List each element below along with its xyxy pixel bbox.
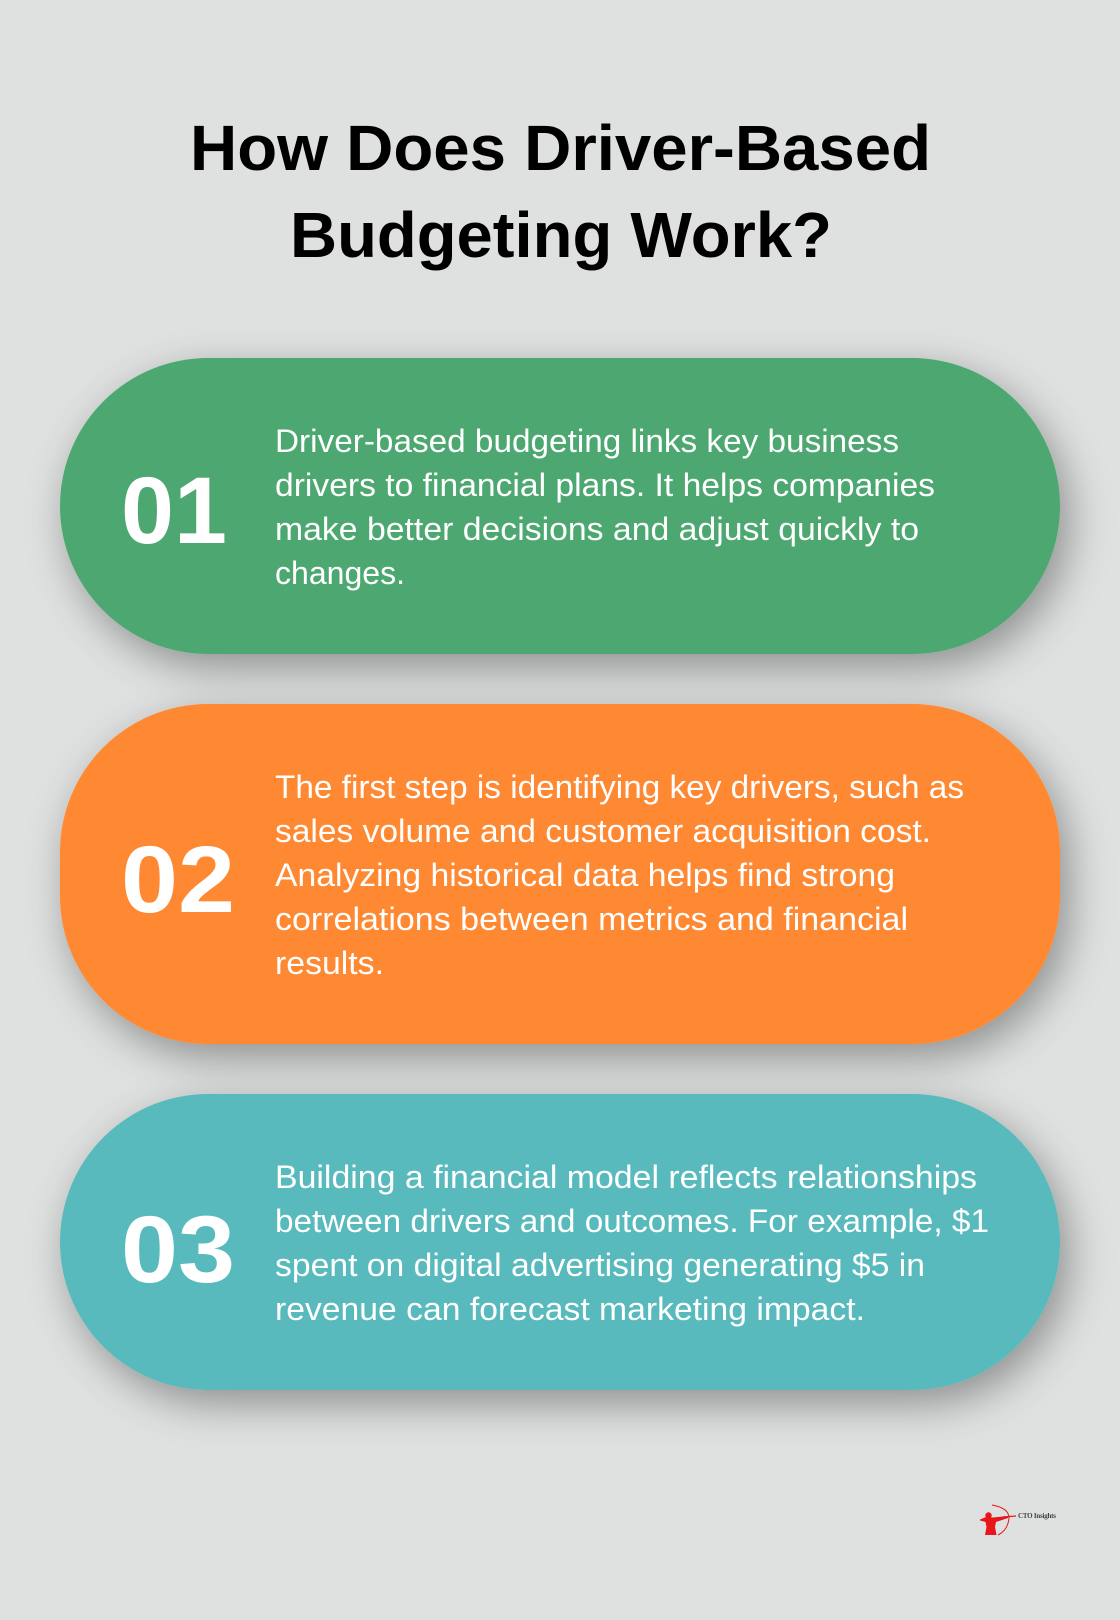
step 03 text: Building a financial model reflects relationships [275, 1159, 977, 1195]
number 02: 02 [121, 827, 235, 933]
panel: step 02 [60, 704, 1060, 1044]
step 01 text: drivers to financial plans. It helps companies [275, 467, 935, 503]
green pill background [60, 358, 1060, 654]
logo text: CTO Insights [1018, 1512, 1056, 1520]
step 01 text: Driver-based budgeting links key business [275, 423, 899, 459]
panel: step 03 [60, 1094, 1060, 1390]
step 03 text: between drivers and outcomes. For example, $1 [275, 1203, 989, 1239]
number 01: 01 [121, 458, 227, 564]
step 03 text [275, 1159, 989, 1327]
orange pill background [60, 704, 1060, 1044]
title: Budgeting Work? [290, 199, 832, 271]
step 01 text: changes. [275, 555, 405, 591]
logo: CTO Insights [980, 1505, 1056, 1535]
step 02 text: The first step is identifying key drivers, such as [275, 769, 964, 805]
number 03: 03 [121, 1197, 235, 1303]
step 03 text: revenue can forecast marketing impact. [275, 1291, 865, 1327]
title: How Does Driver-Based [190, 112, 931, 184]
step 02 text: Analyzing historical data helps find strong [275, 857, 895, 893]
step 01 text [275, 423, 935, 591]
teal pill background [60, 1094, 1060, 1390]
step 02 text: correlations between metrics and financial [275, 901, 908, 937]
icon: red archer [980, 1505, 1016, 1535]
step 01 text: make better decisions and adjust quickly to [275, 511, 919, 547]
step 03 text: spent on digital advertising generating $5 in [275, 1247, 925, 1283]
title [190, 112, 931, 271]
panel: step 01 [60, 358, 1060, 654]
step 02 text: sales volume and customer acquisition cost. [275, 813, 931, 849]
step 02 text: results. [275, 945, 384, 981]
step 02 text [275, 769, 964, 981]
